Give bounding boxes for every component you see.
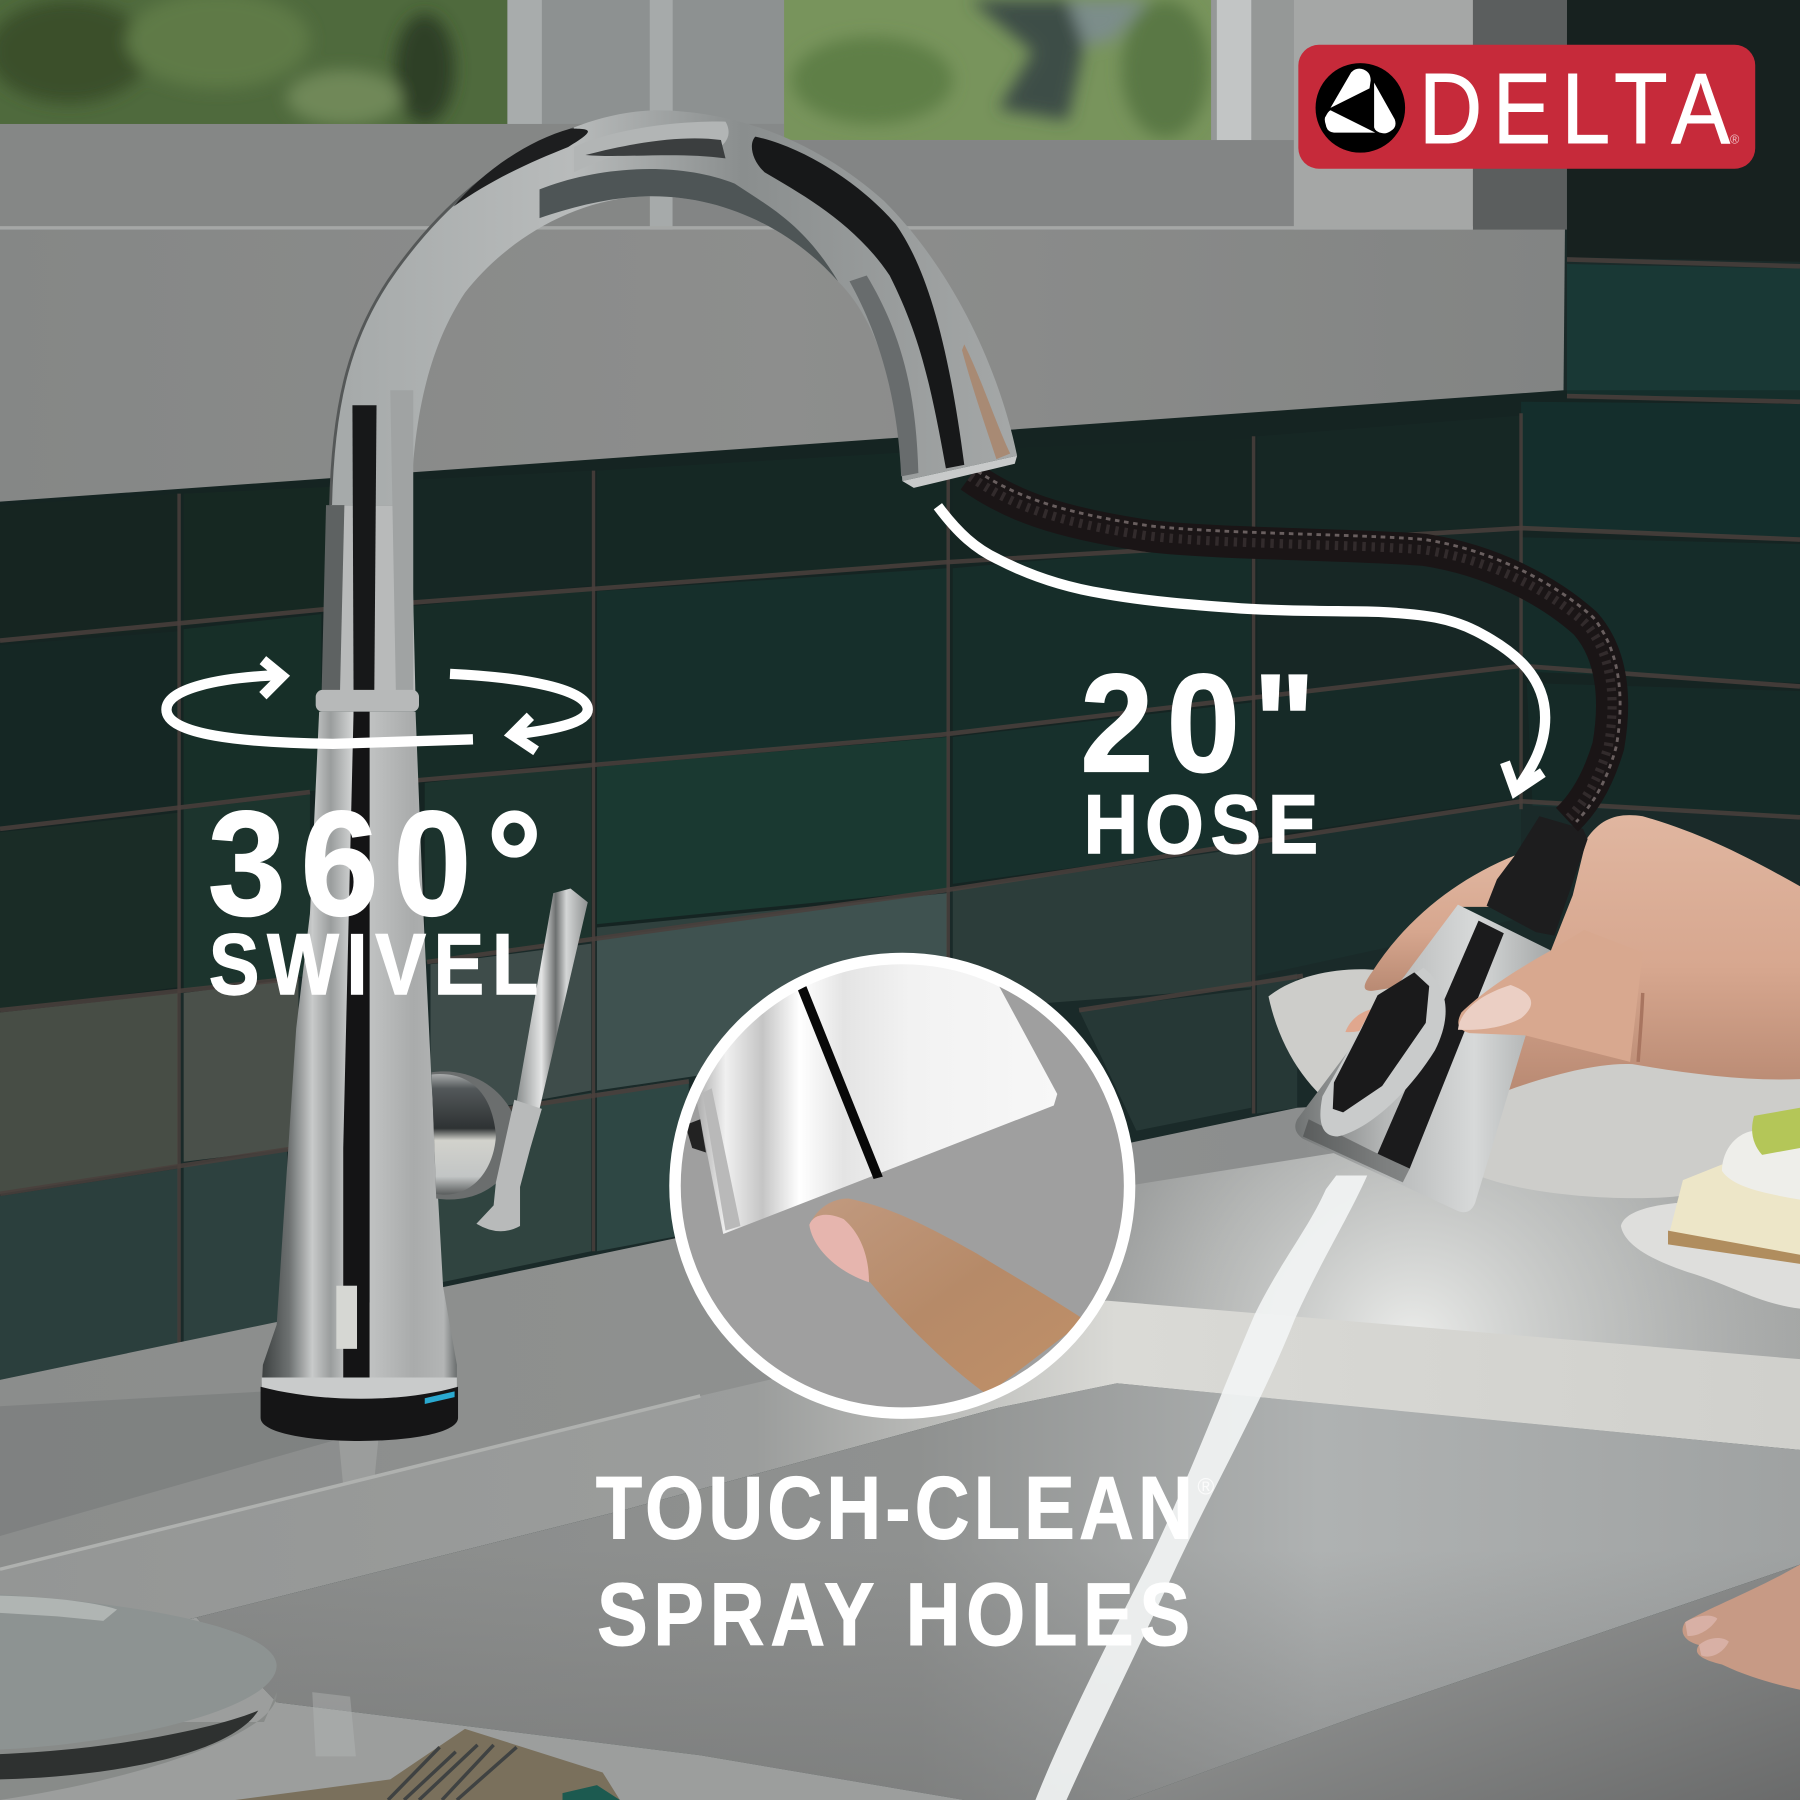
logo emblem: [1316, 63, 1405, 153]
touch-clean label: TOUCH-CLEAN: [596, 1457, 1193, 1558]
spray nozzle close-up: [685, 947, 1057, 1234]
swivel label: SWIVEL: [209, 918, 538, 1013]
hose label: [1080, 645, 1318, 871]
hose label: 20": [1080, 645, 1315, 801]
touch-clean label: ®: [1197, 1474, 1214, 1500]
front deck right: [1127, 1565, 1800, 1800]
handle hub: [432, 1071, 519, 1199]
touch-clean label: [596, 1457, 1214, 1664]
napkin and forks: [235, 1729, 620, 1800]
cake on plate: [1621, 1108, 1800, 1309]
hand holding spray head: [1345, 815, 1800, 1091]
hose label: HOSE: [1084, 777, 1318, 871]
countertop: [0, 1079, 1800, 1800]
touch-clean detail circle: [675, 947, 1130, 1413]
Delta logo badge: ®: [1730, 132, 1740, 146]
hose connector: [1487, 816, 1588, 936]
second hand lower right: [1683, 1565, 1800, 1690]
bowl: [1268, 969, 1800, 1198]
hand thumb: [1458, 930, 1643, 1062]
faucet: [261, 110, 1017, 1441]
faucet base ring: [261, 1387, 458, 1441]
water stream: [1035, 1176, 1367, 1800]
handle lower knob: [476, 1100, 542, 1231]
stacked plates: [0, 1595, 277, 1800]
sink rim: [0, 1301, 1800, 1667]
sink basin: [196, 1383, 1800, 1800]
faucet column: [321, 390, 416, 700]
swivel rotation arrow: [166, 660, 588, 751]
Delta logo badge: [1298, 45, 1755, 169]
fingertip: [809, 1198, 1085, 1395]
window and sill: [0, 0, 1567, 502]
handle lever: [517, 889, 588, 1109]
spray head control pod: [1320, 968, 1446, 1136]
swivel label: 360°: [208, 780, 542, 947]
tile grout lines: [0, 259, 1800, 1343]
front deck left: [0, 1617, 964, 1800]
touch-clean label: SPRAY HOLES: [597, 1564, 1190, 1664]
faucet lower body: [262, 712, 457, 1400]
faucet arch: [331, 110, 1017, 505]
spray head: [1295, 905, 1551, 1212]
swivel collar: [316, 690, 419, 712]
hose arrow: [938, 506, 1545, 791]
logo wordmark: DELTA: [1419, 53, 1730, 164]
window view: trees: [0, 0, 1211, 140]
braided hose: [970, 466, 1620, 822]
